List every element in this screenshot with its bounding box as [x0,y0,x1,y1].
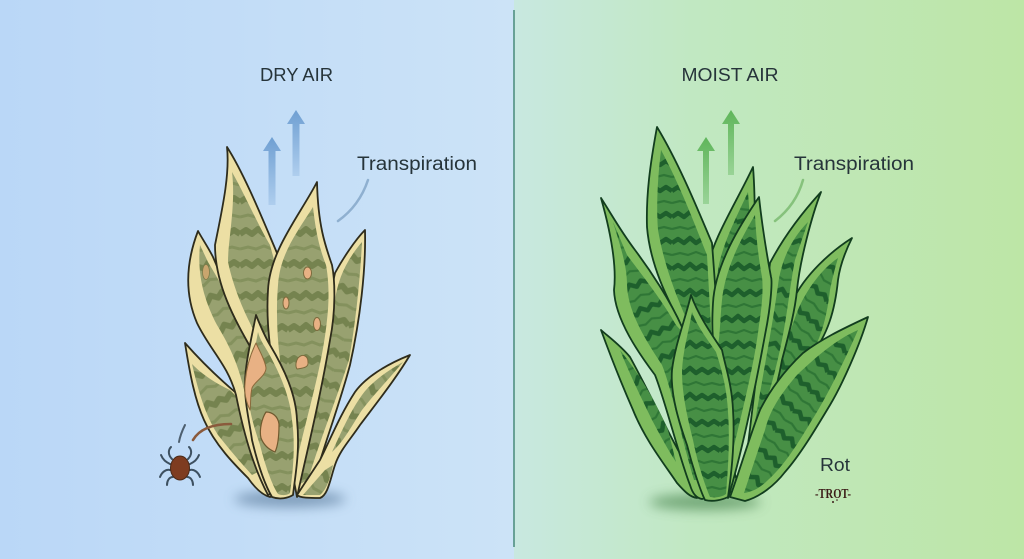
leaf: tall back [647,127,725,420]
leaf: right back [745,192,821,470]
leaf: far right back [750,238,852,440]
leaf: right back [296,230,365,495]
callout line: transpiration moist side [775,180,803,221]
leaf: right big [730,317,868,501]
shadow: moist plant [649,494,761,510]
leaf: left big [601,198,740,499]
label: transpiration dry side: Transpiration [357,154,477,175]
leaf: front with brown patches [245,315,298,498]
leaf: left back [188,231,300,495]
leaf: tall back [215,147,290,400]
icon: spider mite [160,447,200,485]
leaf: lower left [185,343,290,497]
panel background: moist air [514,0,1024,559]
callout line: transpiration dry side [338,180,368,221]
arrows: transpiration dry side [263,110,305,205]
label: rot: Rot [820,455,850,475]
shadow: dry plant [234,491,346,507]
leaf: center back [706,167,755,420]
leaf: center [700,197,771,498]
mark: mite motion dash [179,425,185,442]
plant: dry unhealthy snake plant [185,147,410,498]
leaf: far left low [601,330,705,498]
leaf: center with spots [267,182,334,497]
leaf: low right [297,355,410,498]
arrows: transpiration moist side [697,110,740,204]
label: transpiration moist side: Transpiration [794,154,914,175]
panel background: dry air [0,0,514,559]
arrow: mite to leaf [193,424,231,440]
leaf: front [672,295,734,501]
icon: rot mark: -TROT- [815,487,851,502]
heading: dry air: DRY AIR [260,65,333,85]
plant: moist healthy snake plant [601,127,868,501]
heading: moist air: MOIST AIR [682,65,778,85]
